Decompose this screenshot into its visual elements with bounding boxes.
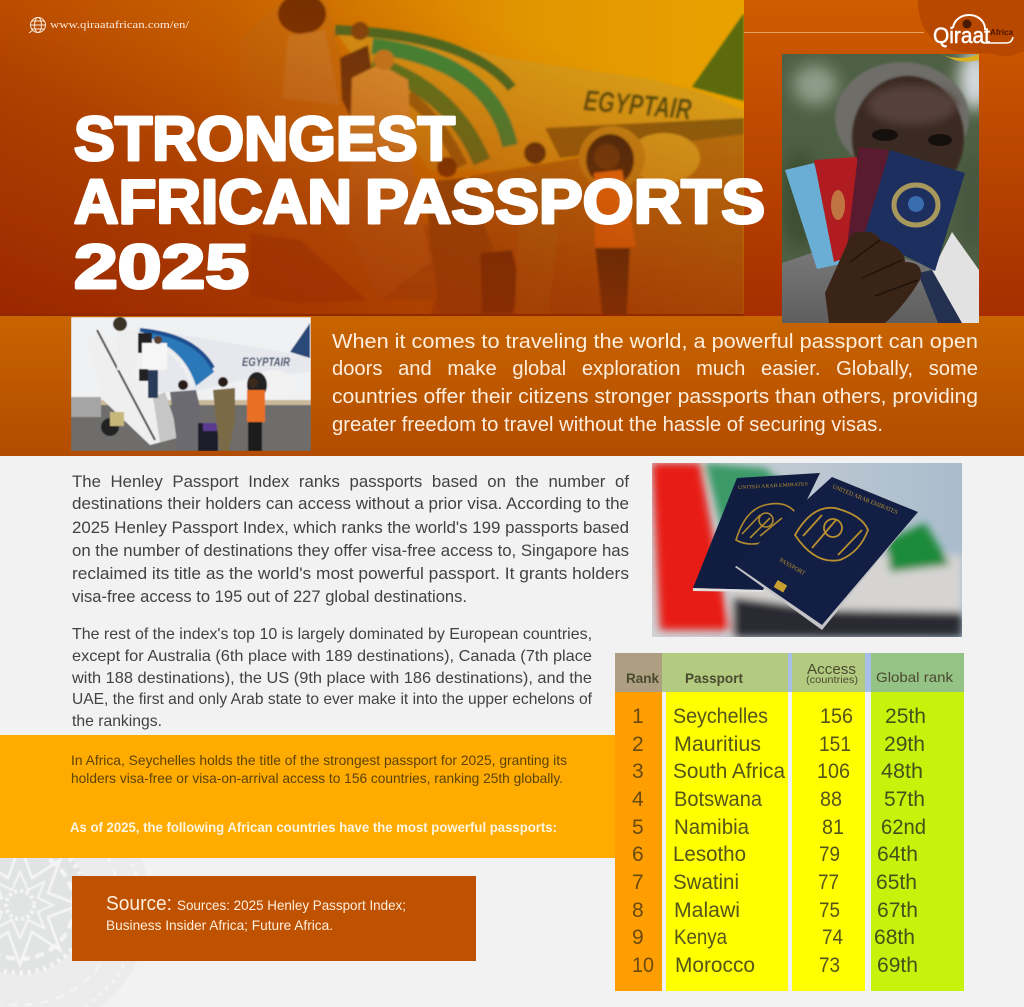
column: access: 81 bbox=[822, 816, 844, 839]
paragraph: Henley Passport Index bbox=[72, 472, 629, 606]
column: access: 73 bbox=[819, 954, 840, 977]
paragraph: rest of the top 10: with 188 destinations), the US (9th place with 186 destinations), and the bbox=[71, 670, 592, 687]
column: access: 151 bbox=[819, 733, 851, 756]
hand bbox=[825, 232, 921, 323]
photo: passengers leaving airplane: EGYPTAIR bbox=[242, 355, 290, 369]
column: access: 79 bbox=[819, 843, 840, 866]
column: passport: Botswana bbox=[674, 788, 762, 811]
photo: passengers leaving airplane bbox=[71, 317, 311, 451]
icon: globe bbox=[29, 18, 46, 33]
source box: Sources: 2025 Henley Passport Index; bbox=[177, 897, 406, 913]
table header: Passport bbox=[685, 670, 743, 686]
intro text block bbox=[332, 331, 978, 436]
logo: Africa bbox=[990, 27, 1013, 37]
column: passport: Lesotho bbox=[673, 843, 746, 866]
column: global rank: 25th bbox=[885, 705, 926, 728]
column: rank: 2 bbox=[632, 733, 644, 756]
title: STRONGEST bbox=[74, 105, 455, 174]
header background: hero area bbox=[0, 0, 744, 316]
website link: www.qiraatafrican.com/en/ bbox=[50, 19, 190, 31]
table header: Access bbox=[807, 661, 856, 678]
source box: Business Insider Africa; Future Africa. bbox=[106, 917, 333, 933]
website link bbox=[29, 18, 190, 33]
table header bbox=[615, 653, 964, 692]
column: rank: 7 bbox=[632, 871, 644, 894]
column: access: 156 bbox=[820, 705, 853, 728]
passports bbox=[785, 163, 845, 269]
front passport bbox=[735, 517, 914, 630]
mandala background pattern bbox=[0, 858, 84, 976]
intro text block: countries offer their citizens stronger passports than others, providing bbox=[332, 386, 978, 408]
logo bbox=[918, 0, 1024, 62]
column: rank: 5 bbox=[632, 816, 644, 839]
column: rank: 8 bbox=[632, 899, 644, 922]
column: passport: Seychelles bbox=[673, 705, 768, 728]
paragraph: Henley Passport Index: The Henley Passport Index ranks passports based on the number of bbox=[72, 472, 629, 491]
column: global rank: 67th bbox=[877, 899, 918, 922]
intro text block: When it comes to traveling the world, a powerful passport can open bbox=[332, 331, 978, 353]
column: passport: Kenya bbox=[674, 926, 727, 949]
suit and shirt bbox=[782, 253, 938, 323]
column: passport: Malawi bbox=[674, 899, 740, 922]
column: access: 75 bbox=[819, 899, 840, 922]
photo: passports held by a man bbox=[780, 50, 991, 323]
intro band background bbox=[0, 316, 1024, 456]
source box: Source: bbox=[106, 893, 172, 915]
orange callout band: As of 2025, the following African countries have the most powerful passports: bbox=[70, 819, 557, 835]
paragraph: rest of the top 10: except for Australia (6th place with 189 destinations), Canada (7th place bbox=[72, 648, 592, 665]
column: passport: Morocco bbox=[675, 954, 755, 977]
column: access: 106 bbox=[817, 760, 850, 783]
column: access bbox=[792, 692, 865, 991]
column: passport: Mauritius bbox=[674, 733, 761, 756]
column: rank bbox=[615, 692, 662, 991]
hero photo: airplane and passengers bbox=[240, 0, 744, 316]
column: rank: 10 bbox=[632, 954, 654, 977]
column: global rank: 29th bbox=[884, 733, 925, 756]
column: global rank: 48th bbox=[881, 760, 923, 783]
column: rank: 9 bbox=[632, 926, 644, 949]
orange callout band bbox=[0, 735, 616, 858]
source box bbox=[72, 876, 476, 961]
column: rank: 1 bbox=[632, 705, 644, 728]
photo: UAE passports: PASSPORT bbox=[778, 558, 806, 577]
table header: Global rank bbox=[876, 669, 954, 685]
column: access: 74 bbox=[822, 926, 843, 949]
paragraph: Henley Passport Index: reclaimed its title as the world's most powerful passport. It grants holders bbox=[72, 564, 629, 583]
paragraph: rest of the top 10: The rest of the index's top 10 is largely dominated by European countries, bbox=[72, 626, 592, 643]
paragraph: Henley Passport Index: destinations their holders can access without a prior visa. According to the bbox=[72, 494, 629, 513]
orange callout band: holders visa-free or visa-on-arrival access to 156 countries, ranking 25th globally. bbox=[71, 770, 563, 786]
photo: UAE passports: UNITED ARAB EMIRATES bbox=[831, 484, 898, 516]
column: global rank bbox=[871, 692, 964, 991]
column: global rank: 64th bbox=[877, 843, 918, 866]
title: PASSPORTS bbox=[365, 168, 765, 237]
column: global rank: 62nd bbox=[881, 816, 926, 839]
column: rank: 4 bbox=[632, 788, 644, 811]
title bbox=[74, 105, 765, 302]
right header panel bbox=[744, 0, 1024, 316]
column: passport: Swatini bbox=[673, 871, 739, 894]
intro text block: doors and make global exploration much easier. Globally, some bbox=[332, 358, 978, 380]
ranking table bbox=[615, 653, 964, 991]
photo: UAE passports bbox=[652, 463, 962, 637]
back passport bbox=[693, 473, 820, 590]
paragraph: rest of the top 10: UAE, the first and only Arab state to ever make it into the upper echelons of bbox=[72, 691, 593, 708]
column: global rank: 57th bbox=[884, 788, 925, 811]
column: rank: 3 bbox=[632, 760, 644, 783]
table header: (countries) bbox=[806, 675, 858, 686]
column: global rank: 68th bbox=[874, 926, 915, 949]
orange callout band: In Africa, Seychelles holds the title of the strongest passport for 2025, granting its bbox=[71, 752, 567, 768]
paragraph: Henley Passport Index: visa-free access to 195 out of 227 global destinations. bbox=[72, 587, 467, 606]
column: passport bbox=[666, 692, 788, 991]
paragraph: Henley Passport Index: 2025 Henley Passport Index, which ranks the world's 199 passports based bbox=[72, 518, 629, 537]
title: 2025 bbox=[74, 233, 249, 302]
column: access: 77 bbox=[818, 871, 839, 894]
column: global rank: 65th bbox=[876, 871, 917, 894]
column: access: 88 bbox=[820, 788, 842, 811]
paragraph: rest of the top 10: the rankings. bbox=[72, 713, 162, 730]
column: rank: 6 bbox=[632, 843, 644, 866]
column: passport: South Africa bbox=[673, 760, 785, 783]
hero photo: airplane and passengers: EGYPTAIR bbox=[582, 85, 693, 126]
photo: UAE passports: UNITED ARAB EMIRATES bbox=[738, 482, 808, 491]
logo: Qiraat bbox=[933, 23, 990, 48]
title: AFRICAN bbox=[74, 168, 352, 237]
paragraph: Henley Passport Index: on the number of destinations they offer visa-free access to, Singapore has bbox=[72, 541, 629, 560]
intro text block: greater freedom to travel without the hassle of securing visas. bbox=[332, 414, 883, 436]
column: passport: Namibia bbox=[674, 816, 749, 839]
column: global rank: 69th bbox=[877, 954, 918, 977]
table header: Rank bbox=[626, 670, 659, 686]
head and hair bbox=[834, 62, 970, 157]
paragraph: rest of the top 10 bbox=[71, 626, 593, 730]
